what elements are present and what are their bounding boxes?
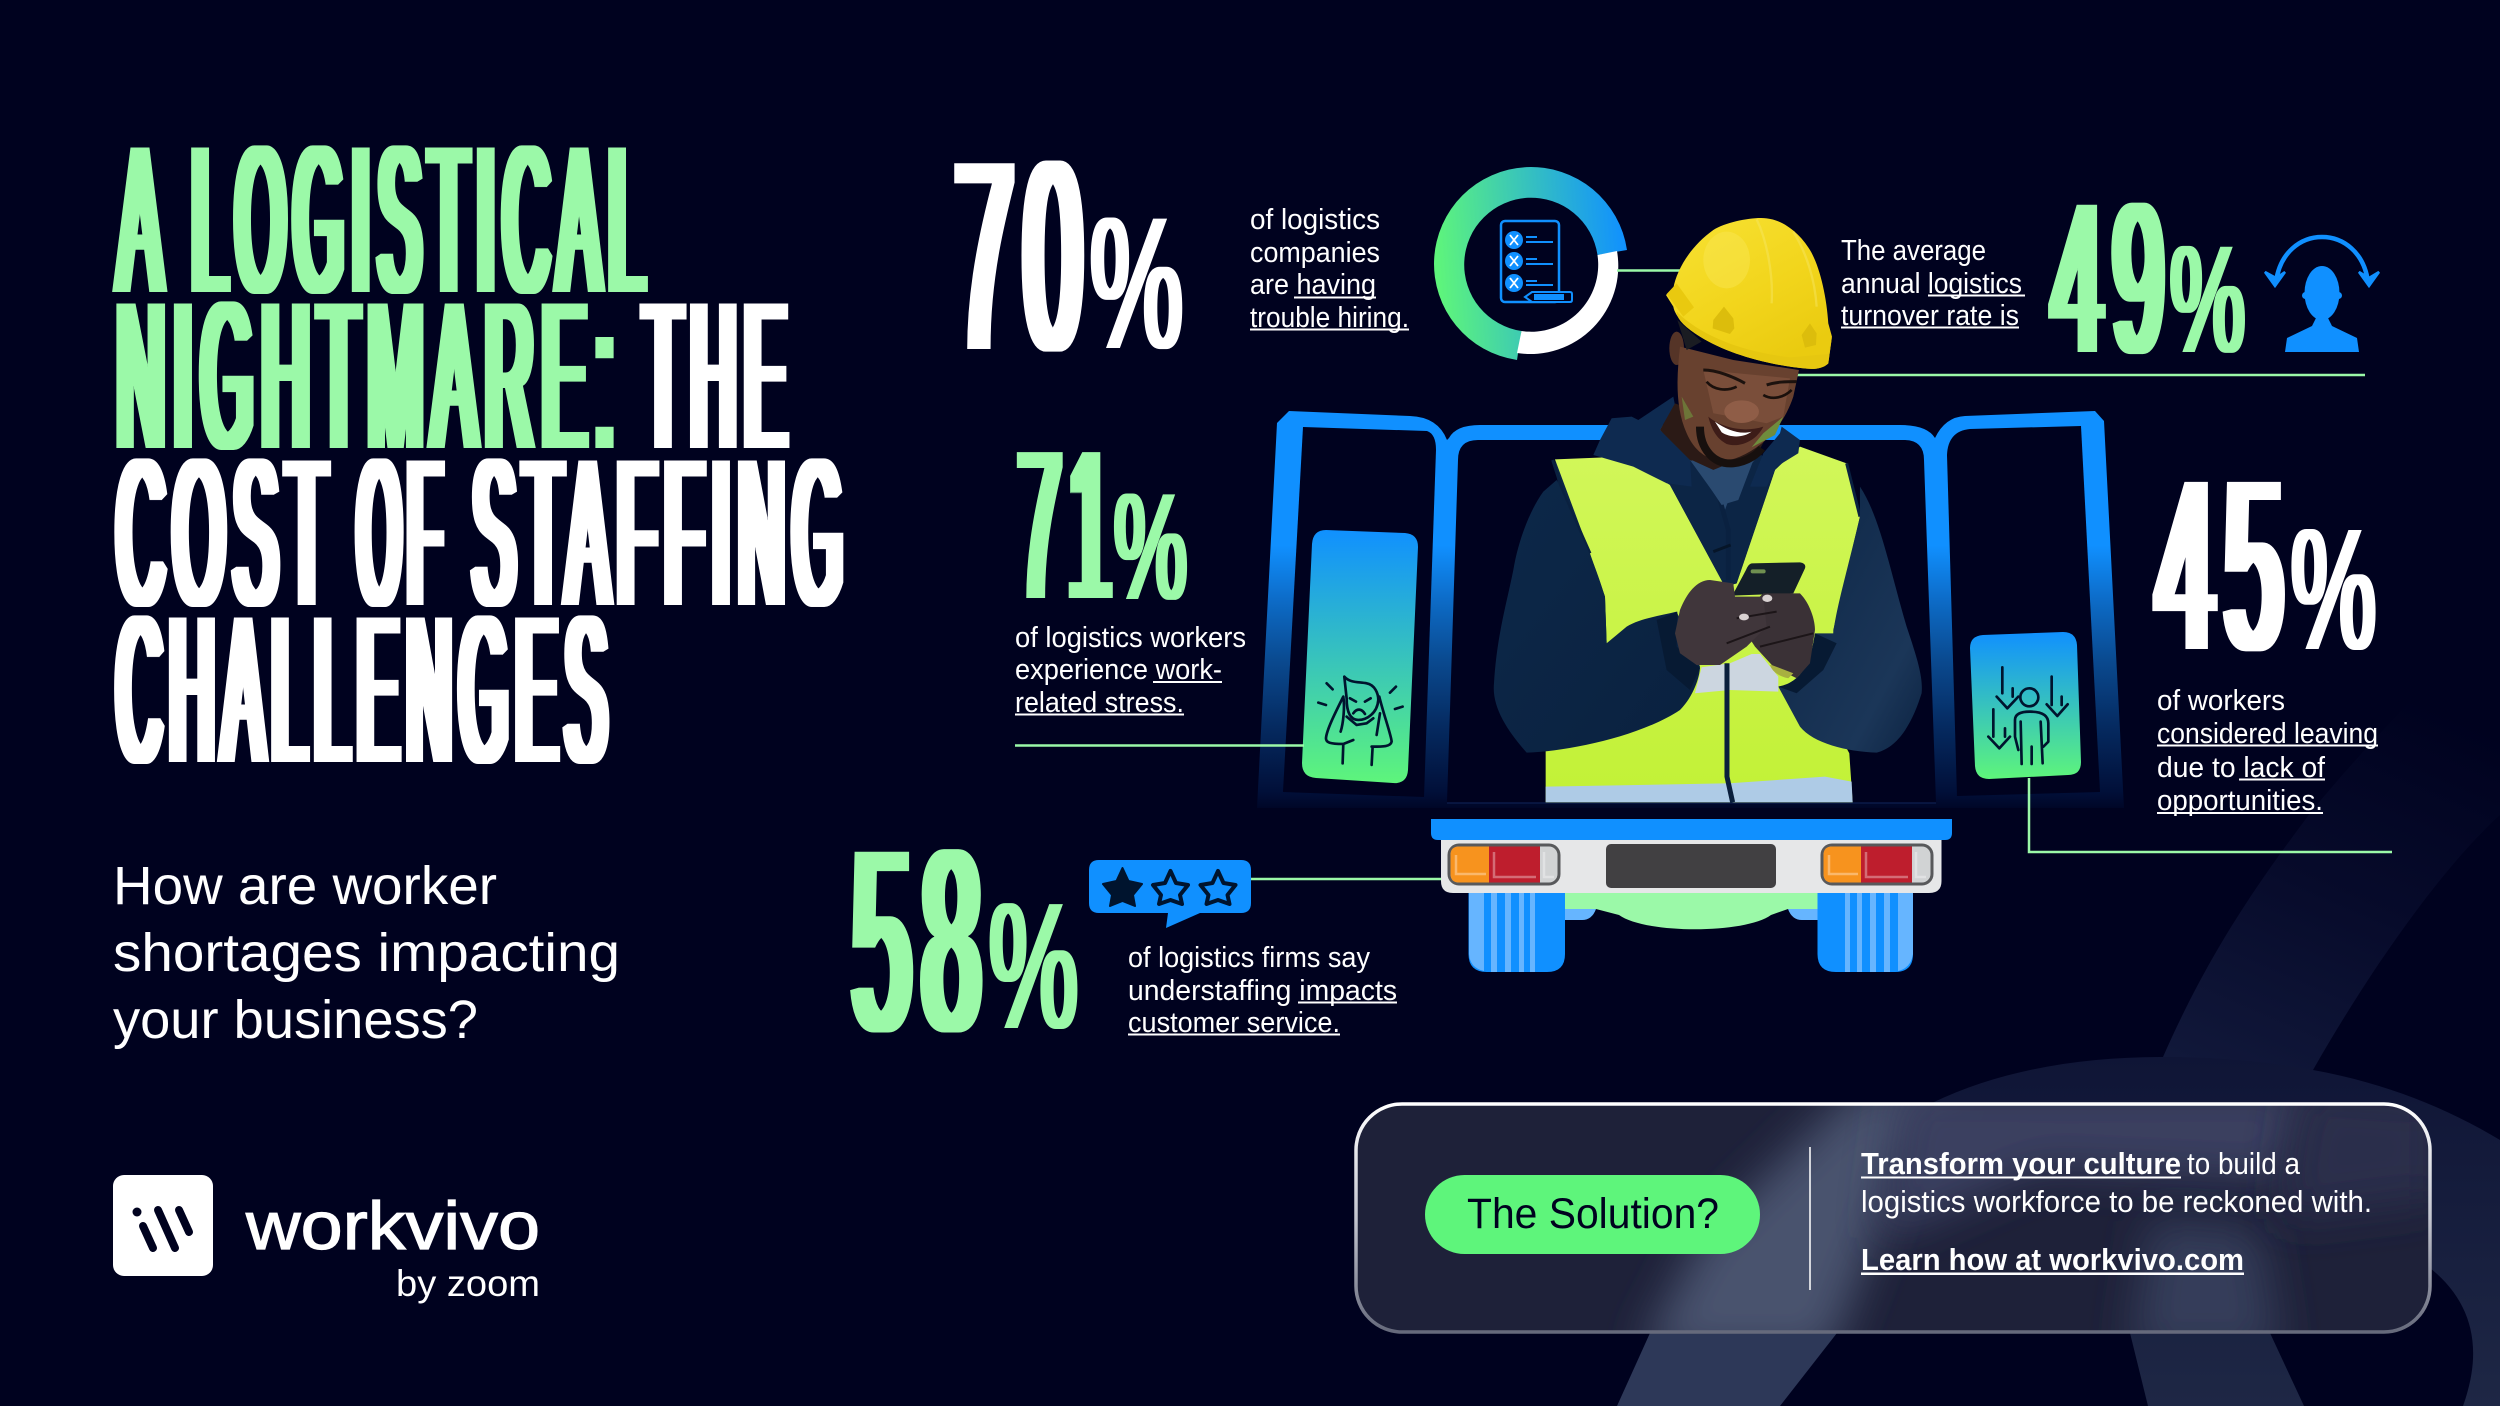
description: of workers [2157,685,2285,717]
right hand [1737,593,1815,678]
call to action text: to build a [2187,1146,2301,1181]
stat: 58 percent [853,796,1397,1085]
description: considered leaving [2157,718,2378,750]
subtitle: your business? [113,990,478,1050]
stat: 49 percent [1841,159,2379,398]
truck rear: bumper, lights, wheels [1431,819,1952,972]
number: 45 [2157,430,2294,701]
connector: 71 percent to card [1015,744,1304,747]
description: are having [1250,269,1376,301]
icon: turnover worker [2265,237,2379,352]
hard hat [1666,218,1832,369]
connector: right card to 45 percent [2029,778,2392,852]
subtitle: shortages impacting [113,923,620,983]
connector: 58 percent bubble to truck [1251,878,1442,880]
description: trouble hiring. [1250,302,1409,334]
right wheel [1818,890,1913,972]
phone [1732,562,1805,596]
number [1019,406,1187,643]
panel: the solution [1354,1102,2432,1334]
icon: checklist [1501,221,1572,302]
vest [1546,447,1860,802]
icon: person with down arrows [1988,667,2068,764]
right door inner [1947,426,2100,796]
left door inner [1283,427,1436,797]
button: the solution: The Solution? [1467,1190,1719,1238]
title: OF [358,415,449,650]
number: % [2170,214,2245,385]
ear [1669,332,1684,365]
description [1250,204,1409,334]
text: CHALLENGES [117,572,615,807]
chart: 70 percent donut [1434,167,1627,360]
worker figure [1494,218,1922,802]
axle [1565,893,1818,929]
right tail light [1822,845,1932,884]
number: 49 [2052,159,2174,398]
license plate [1606,844,1776,888]
torso, vest, arms and hands [1494,447,1922,802]
stat: 70 percent [956,106,1409,407]
cargo opening [1447,440,1936,803]
description: customer service. [1128,1007,1340,1039]
number: % [1090,178,1183,388]
number [853,796,1078,1085]
decorative swirl shape [1617,610,2500,1406]
logo [113,1175,540,1304]
description: understaffing impacts [1128,975,1397,1007]
text: THE [644,258,795,493]
number: % [2291,492,2376,686]
connector: donut to hat [1617,269,1690,272]
icon: rating speech bubble [1089,860,1251,928]
number [2157,430,2376,701]
neck [1660,403,1767,470]
number: % [1114,462,1187,632]
description: of logistics firms say [1128,942,1370,974]
number: 71 [1019,406,1119,643]
subtitle [113,856,620,1050]
description: turnover rate is [1841,300,2019,332]
face [1678,347,1799,461]
title [117,102,851,807]
description: of logistics workers [1015,622,1246,654]
truck cargo frame and doors [1257,411,2124,808]
right sleeve [1778,487,1922,753]
call to action text: logistics workforce to be reckoned with. [1861,1184,2372,1219]
panel glass glow [1634,1106,2428,1330]
reflective belt [1546,777,1853,802]
number: 58 [853,796,992,1085]
description [2157,685,2378,817]
number [2052,159,2245,398]
title: COST [117,415,336,650]
number: 70 [956,106,1093,407]
description: companies [1250,237,1380,269]
wordmark: workvivo [245,1188,540,1264]
description: due to lack of [2157,752,2326,784]
stat: 71 percent [1015,406,1246,719]
card: stressed worker icon [1302,530,1418,783]
cuffs [1657,612,1700,690]
number: % [989,866,1078,1067]
description: related stress. [1015,687,1184,719]
bumper [1441,838,1942,893]
title: A [118,102,171,337]
description: The average [1841,235,1986,267]
call to action text: Learn how at workvivo.com [1861,1242,2244,1277]
left wheel [1468,890,1565,972]
text: NIGHTMARE: [117,258,623,493]
deck [1431,819,1952,840]
connector: 49 percent underline [1790,374,2365,376]
description: experience work- [1015,654,1222,686]
text: LOGISTICAL [192,102,653,337]
description: of logistics [1250,204,1380,236]
description: opportunities. [2157,785,2323,817]
head, hood and hard hat [1593,218,1832,505]
number [956,106,1183,407]
text: STAFFING [473,415,851,650]
description [1841,235,2025,332]
description [1128,942,1397,1039]
call to action text [1861,1146,2372,1277]
left hand [1675,580,1767,665]
hood [1593,397,1692,487]
logo mark [113,1175,213,1276]
stat: 45 percent [2157,430,2378,817]
left tail light [1449,845,1559,884]
description [1015,622,1246,719]
description: annual logistics [1841,268,2022,300]
card: no opportunities icon [1970,632,2081,779]
icon: stressed person [1318,677,1403,765]
left sleeve [1494,480,1700,753]
button: the solution [1425,1175,1760,1254]
call to action text: Transform your culture [1861,1146,2181,1181]
subtitle: How are worker [113,856,497,916]
by zoom: by zoom [396,1263,540,1304]
